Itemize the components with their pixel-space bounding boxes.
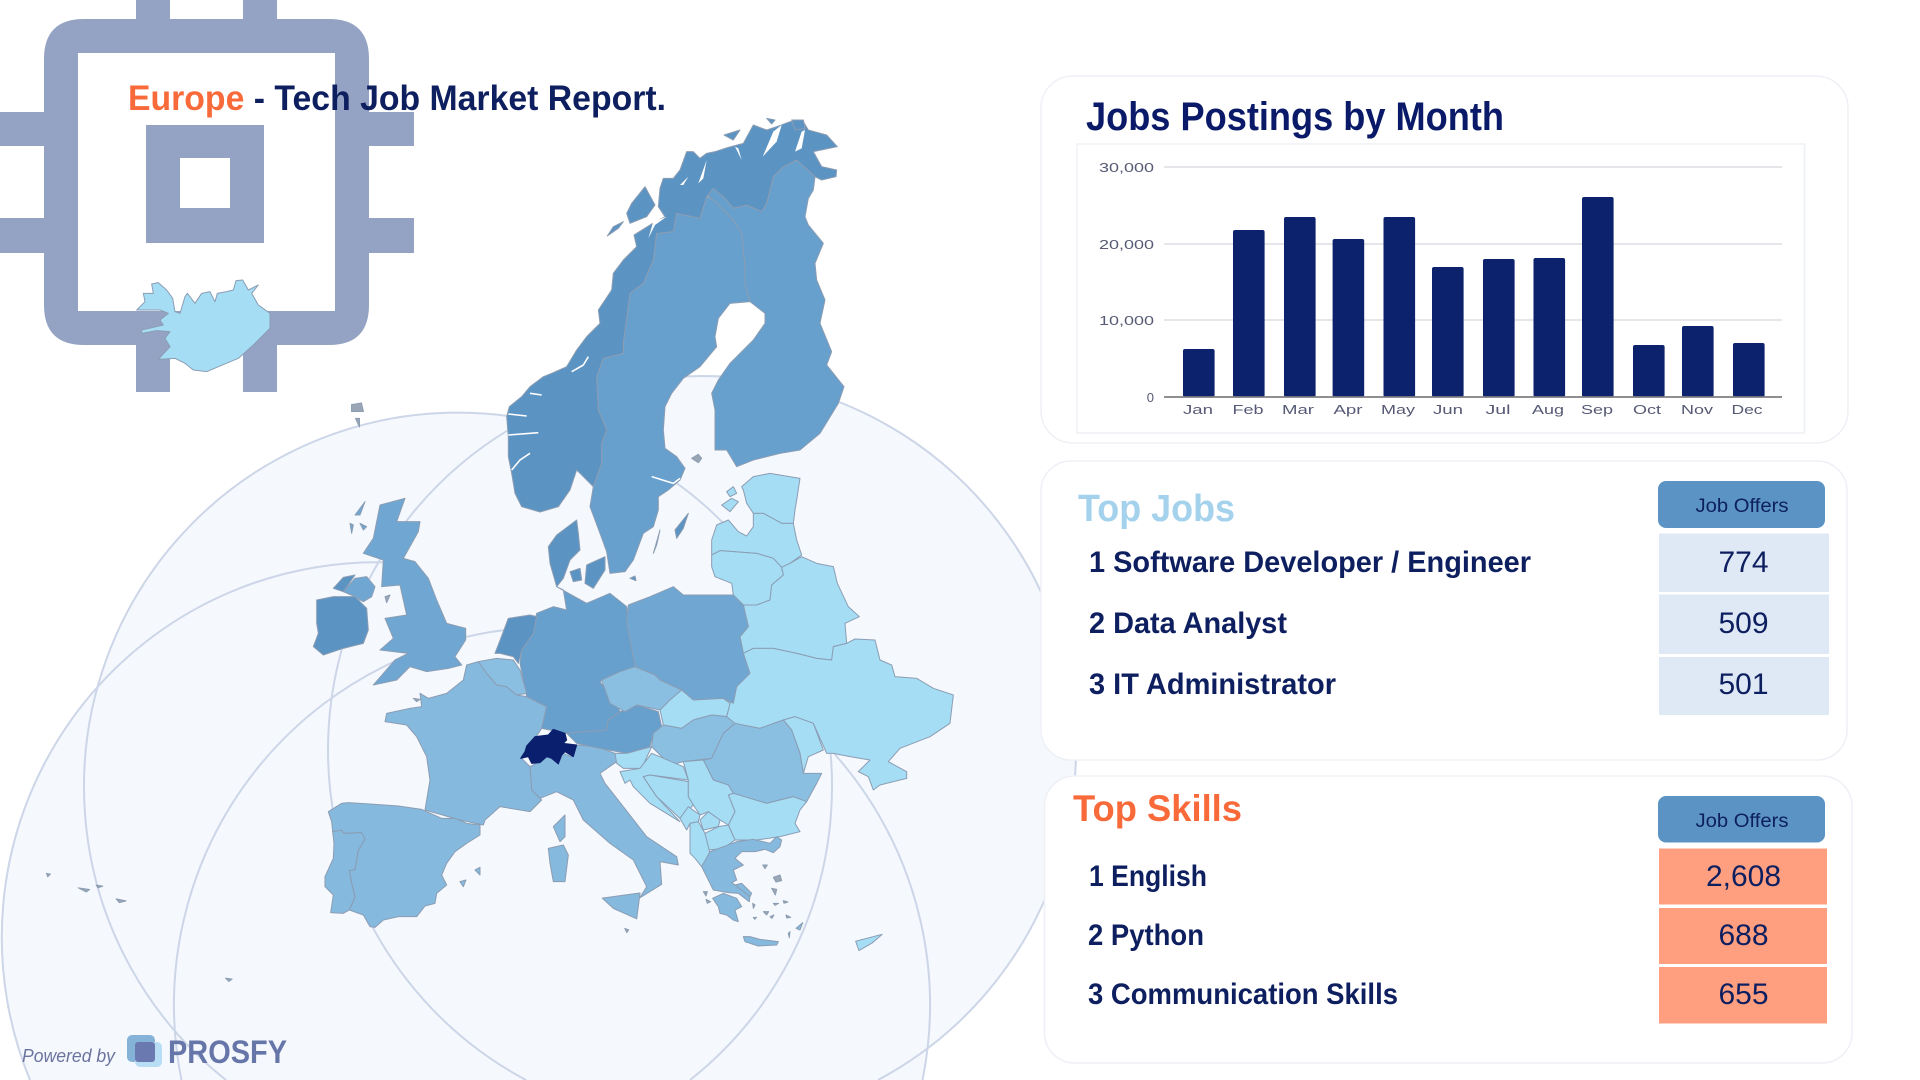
country: Bulgaria [728,793,807,840]
fjords [508,125,805,483]
row: english: 2,608 [1706,860,1781,893]
x axis labels: Oct [1633,402,1662,417]
y axis labels: 20,000 [1099,237,1154,252]
x axis labels: May [1381,402,1416,417]
country: Portugal [325,830,365,913]
country: Kosovo [700,812,720,830]
row: communication skills: 655 [1718,978,1769,1011]
bar chart [1077,144,1804,433]
y axis labels: 0 [1147,390,1154,405]
country: Spain [328,803,480,927]
country: Slovenia [615,747,652,768]
title: Europe - Tech Job Market Report. [128,79,666,118]
logo wordmark: PROSFY [168,1034,287,1070]
country: France [385,662,547,825]
bars [1183,197,1765,397]
panel: top skills [1044,776,1852,1063]
country: Germany [520,587,635,733]
x axis labels: Jul [1486,402,1511,417]
islands: Saaremaa and Hiiumaa [722,487,738,512]
heading: top jobs: Top Jobs [1078,488,1235,530]
country: Italy [530,745,678,898]
islands: Corsica and Sardinia [548,815,568,882]
country: Estonia [742,473,800,523]
country: Sweden [590,197,750,573]
heading: chart title: Jobs Postings by Month [1086,95,1504,139]
row: data analyst [1089,594,1829,654]
x axis labels [1183,402,1763,417]
x axis labels: Feb [1232,402,1264,417]
x axis labels: Jun [1433,402,1463,417]
island: Crete [743,937,778,946]
x axis labels: Apr [1334,402,1363,417]
country: Czechia [602,667,682,712]
aegean islands [703,865,803,938]
country: Great Britain [363,498,466,685]
region: Northern Ireland [343,577,375,602]
country: Norway [507,122,837,512]
country: Romania [703,720,822,803]
heading: top skills: Top Skills [1073,788,1242,829]
southern islands [46,873,882,982]
country: Switzerland [521,729,577,764]
x axis labels: Aug [1532,402,1564,417]
row: it administrator: 3 IT Administrator [1089,668,1336,701]
islands: west and north [333,502,420,702]
country: North Macedonia [705,825,735,850]
choropleth map of Europe [46,118,953,982]
country: Belarus [740,557,859,660]
row: python: 688 [1718,919,1769,952]
row: python [1088,908,1827,964]
x axis labels: Dec [1732,402,1763,417]
panel: top jobs [1041,461,1847,760]
row: data analyst: 509 [1718,607,1769,640]
column header: job offers: Job Offers [1696,496,1788,517]
country: Ukraine [727,639,953,790]
powered by text: Powered by [22,1046,116,1066]
islands: Gotland and Oland [653,513,688,553]
row: software developer [1089,534,1829,592]
country: Finland [707,160,844,467]
x axis labels: Sep [1581,402,1613,417]
country: Austria [567,705,662,753]
country: Greece [702,837,782,922]
island: Iceland [137,280,270,372]
x axis labels: Jan [1183,402,1213,417]
column header: job offers [1658,796,1825,842]
map: Greece and Aegean [702,837,803,946]
row: python: 2 Python [1088,919,1204,952]
row: software developer: 774 [1718,546,1769,579]
island: Lofoten [607,118,805,463]
country: Albania [690,822,710,867]
background circles [2,376,1076,1080]
row: software developer: 1 Software Developer / Engineer [1089,546,1531,579]
map: Iberian peninsula [325,803,480,927]
icon: microchip [0,0,414,392]
row: it administrator [1089,657,1829,715]
row: communication skills: 3 Communication Skills [1088,978,1398,1011]
islands: Balearics [460,867,480,887]
row: it administrator: 501 [1718,668,1769,701]
map: eastern Europe [602,473,953,867]
y axis labels: 30,000 [1099,160,1154,175]
x axis labels: Mar [1282,402,1315,417]
x axis labels: Nov [1681,402,1714,417]
country: Poland [627,587,750,703]
column header: job offers: Job Offers [1696,811,1788,832]
country: Bosnia [643,775,693,818]
country: Serbia [683,760,735,825]
row: english [1089,848,1827,904]
islands: Shetland and Faroes [352,403,363,427]
logo mark [127,1035,162,1067]
column header: job offers [1658,481,1825,528]
atlantic islands [46,873,629,982]
country: Belgium [478,658,527,695]
country: Slovakia [660,690,730,728]
country: Netherlands [495,615,537,663]
country: Ireland [313,597,368,655]
y axis labels [1099,160,1154,405]
island: Cyprus [856,934,882,951]
country: Moldova [783,717,823,773]
row: english: 1 English [1089,860,1207,893]
country: Croatia [620,753,688,822]
powered by logo [22,1034,287,1070]
map: western and central Europe [313,498,688,898]
panel: jobs postings by month [1041,76,1848,443]
country: Denmark [548,520,636,588]
y axis labels: 10,000 [1099,313,1154,328]
country: Hungary [652,715,735,765]
country: Latvia [712,513,802,567]
country: Montenegro [680,807,700,830]
row: data analyst: 2 Data Analyst [1089,607,1287,640]
map: Nordic countries [507,118,844,573]
row: communication skills [1088,967,1827,1024]
country: Lithuania [712,551,783,605]
island: Sicily [602,893,640,919]
